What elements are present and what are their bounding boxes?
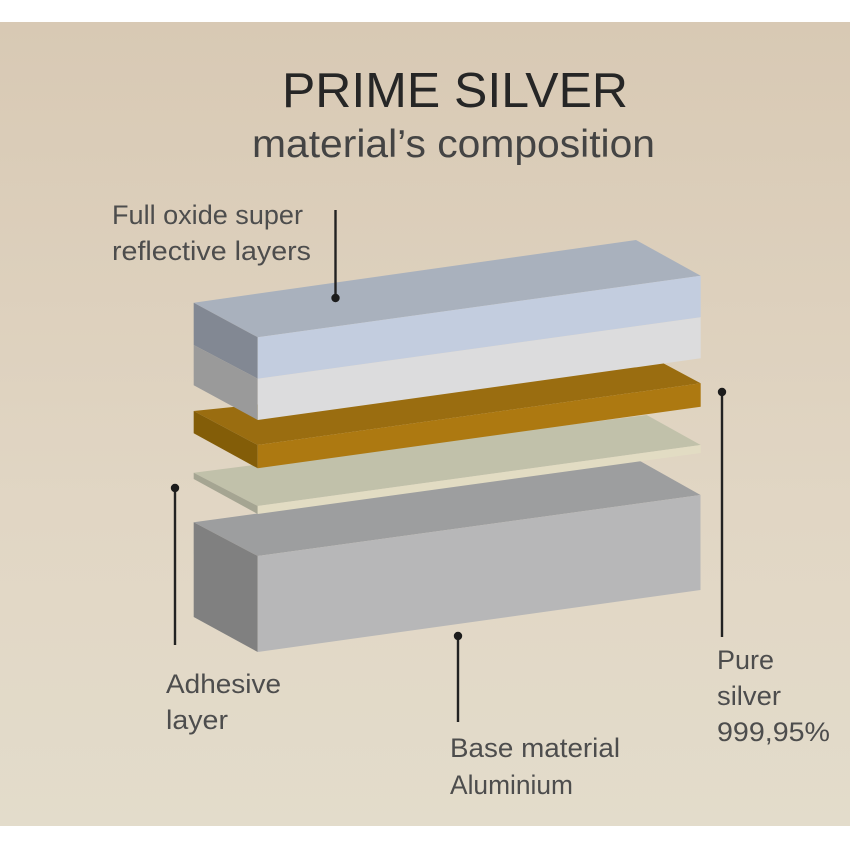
subtitle: material’s composition — [252, 123, 655, 166]
layer: base material aluminium — [194, 461, 700, 652]
callout: pure silver 999,95% — [717, 388, 830, 747]
callout: adhesive layer — [166, 484, 281, 735]
callout: adhesive layer: Adhesive — [166, 669, 281, 699]
layer: adhesive — [194, 415, 701, 514]
callout: pure silver 999,95%: Pure — [717, 645, 774, 675]
title: PRIME SILVER — [282, 64, 628, 118]
layer: full oxide super reflective block — [194, 240, 701, 420]
callout: base material aluminium — [450, 632, 620, 800]
callout: base material aluminium: Aluminium — [450, 770, 573, 800]
callout: full oxide super reflective layers: Full oxide super — [112, 200, 303, 230]
callout: base material aluminium: Base material — [450, 733, 620, 763]
callout: full oxide super reflective layers: reflective layers — [112, 236, 311, 266]
callout: adhesive layer: layer — [166, 705, 228, 735]
callout: pure silver 999,95%: silver — [717, 681, 781, 711]
callout: full oxide super reflective layers — [112, 200, 340, 302]
callout: pure silver 999,95%: 999,95% — [717, 717, 830, 747]
layer: pure silver gold-coloured reflector — [194, 363, 701, 468]
